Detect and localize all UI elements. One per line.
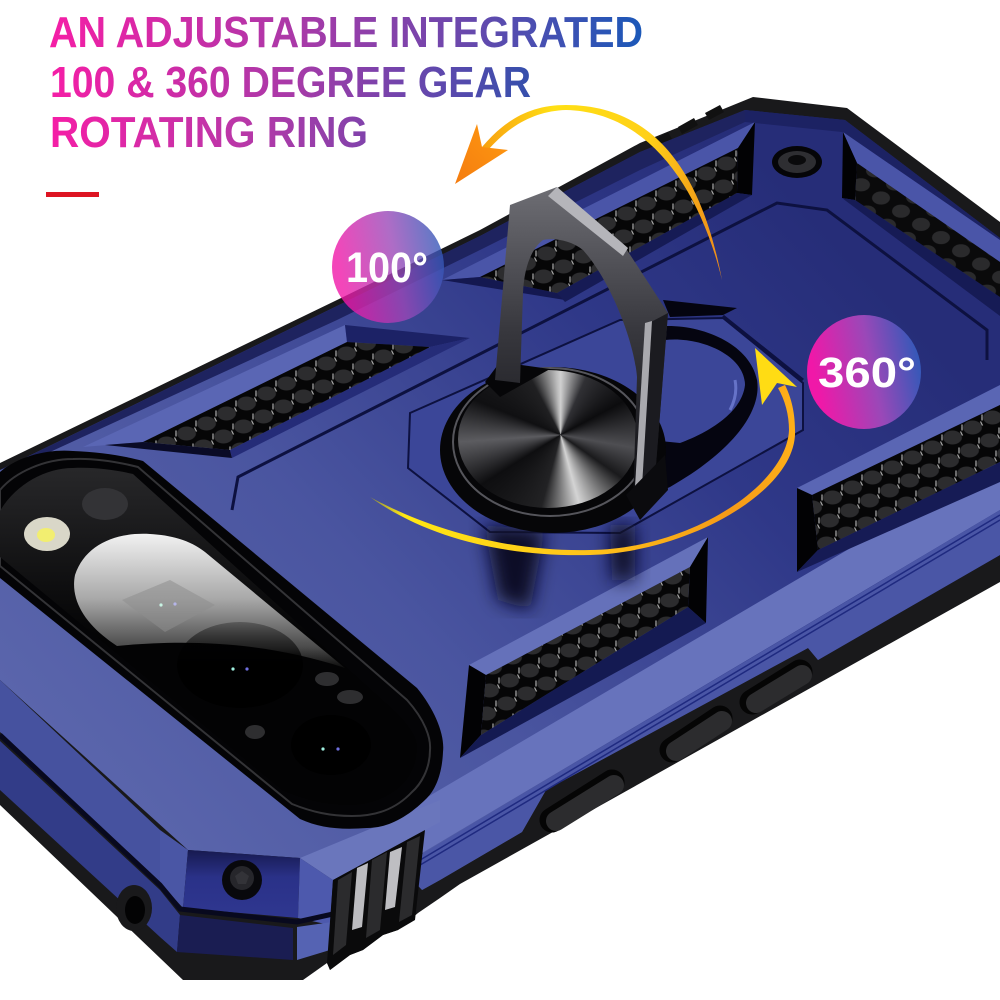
arrow: 100 degree rotation <box>455 105 722 280</box>
ring right leg highlight <box>640 313 668 503</box>
large lens <box>177 622 303 708</box>
camera reflection <box>74 534 345 668</box>
ring recess <box>640 326 758 500</box>
right side light band <box>380 460 1000 878</box>
ring loop <box>495 187 668 503</box>
title <box>49 8 643 157</box>
disc face <box>458 370 638 508</box>
bottom dark strip <box>177 915 293 960</box>
small sensors <box>245 672 363 739</box>
black wedge mark <box>663 300 737 317</box>
grip panel: left <box>83 325 470 458</box>
badge: 100 degrees <box>332 211 444 323</box>
corner facet <box>160 830 188 908</box>
top sensor <box>82 488 128 520</box>
bottom left screw <box>222 860 262 900</box>
title: AN ADJUSTABLE INTEGRATED <box>49 8 643 57</box>
reflected diamond <box>122 580 215 632</box>
camera island <box>0 451 443 829</box>
disc base <box>440 367 666 533</box>
vent grey strips <box>352 863 368 930</box>
badge: 100 degrees: 100° <box>346 244 428 292</box>
inner panel outline <box>232 203 987 510</box>
badge: 360 degrees <box>807 315 921 429</box>
left chamfer with screw seat <box>183 850 300 918</box>
top right screw <box>772 146 822 178</box>
lens glints <box>159 602 340 751</box>
headphone jack <box>116 885 152 931</box>
blue back plate <box>0 110 1000 890</box>
shadows below disc <box>484 525 635 610</box>
grip panel: top right <box>842 132 1000 316</box>
grip panel: bottom <box>460 537 708 758</box>
grip panel: right <box>797 385 1000 572</box>
rim above vents <box>300 800 440 880</box>
top right dark rim <box>745 110 1000 252</box>
red accent line <box>46 192 99 197</box>
arrow: 360 degree rotation <box>370 348 797 555</box>
top edge tabs <box>652 105 724 148</box>
top edge dark stripe <box>0 110 745 470</box>
ring hinge <box>626 455 668 520</box>
title: ROTATING RING <box>50 108 368 157</box>
ring holder <box>408 187 803 610</box>
badge: 360 degrees: 360° <box>818 349 916 397</box>
left lower strip <box>0 680 160 883</box>
side buttons <box>552 672 802 821</box>
title: 100 & 360 DEGREE GEAR <box>50 58 531 107</box>
bottom port vents <box>327 830 425 970</box>
grip panel: top centre <box>442 122 755 302</box>
small lens <box>291 715 371 775</box>
disc notch <box>485 362 550 397</box>
ring base plate <box>408 318 803 533</box>
ring top facet <box>548 187 628 256</box>
flash <box>24 517 70 551</box>
